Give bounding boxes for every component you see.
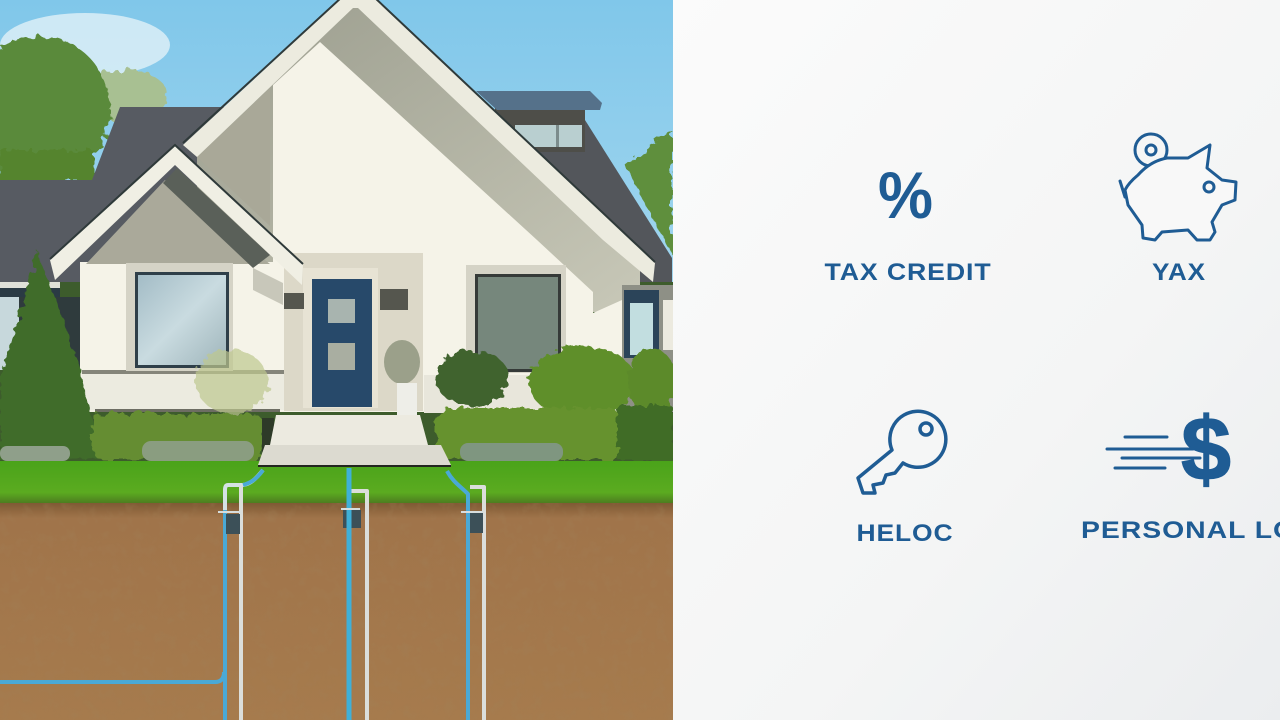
lower wall [80, 262, 284, 412]
label: yax: YAX [1152, 259, 1206, 286]
option: heloc [856, 411, 954, 547]
left sill [82, 370, 284, 412]
right wall base [424, 375, 544, 413]
option: personal loan [1081, 400, 1280, 544]
small gable trim [50, 145, 303, 285]
main gable trim [183, 0, 655, 282]
left window [126, 263, 233, 371]
far left window [0, 282, 80, 397]
roof: back left [0, 107, 300, 290]
trees [0, 36, 672, 255]
front door [312, 279, 372, 407]
small gable soffit [163, 168, 283, 305]
icon: fast dollar: $ [1181, 400, 1231, 500]
small gable siding [86, 180, 270, 264]
front walk slab [258, 445, 451, 467]
groundcover [0, 441, 563, 461]
upper gable siding [197, 88, 270, 226]
lawn [0, 461, 673, 503]
label: tax credit: TAX CREDIT [824, 259, 992, 286]
right window [466, 265, 566, 373]
dormer [476, 91, 602, 152]
label: heloc: HELOC [856, 520, 954, 547]
steps [262, 415, 428, 452]
icon: key [858, 411, 946, 493]
panel: house illustration [0, 0, 676, 720]
option: tax credit [824, 158, 992, 286]
main gable wall [273, 42, 622, 412]
entry lights [284, 289, 408, 310]
ground loop pipes [0, 468, 484, 720]
icon: piggy bank [1120, 134, 1236, 240]
panel: financing options [673, 0, 1280, 720]
far right wall and side window [622, 285, 673, 412]
main gable shade [197, 0, 640, 312]
soil [0, 503, 673, 720]
entry recess [284, 253, 423, 411]
shrubs [0, 250, 676, 462]
wall backing under eaves [0, 282, 673, 462]
cloud [0, 13, 170, 77]
option: yax [1120, 134, 1236, 286]
icon: fast dollar [1107, 400, 1231, 500]
roof: back right [500, 120, 672, 290]
icon: percent: % [878, 158, 933, 232]
planter [384, 340, 420, 416]
